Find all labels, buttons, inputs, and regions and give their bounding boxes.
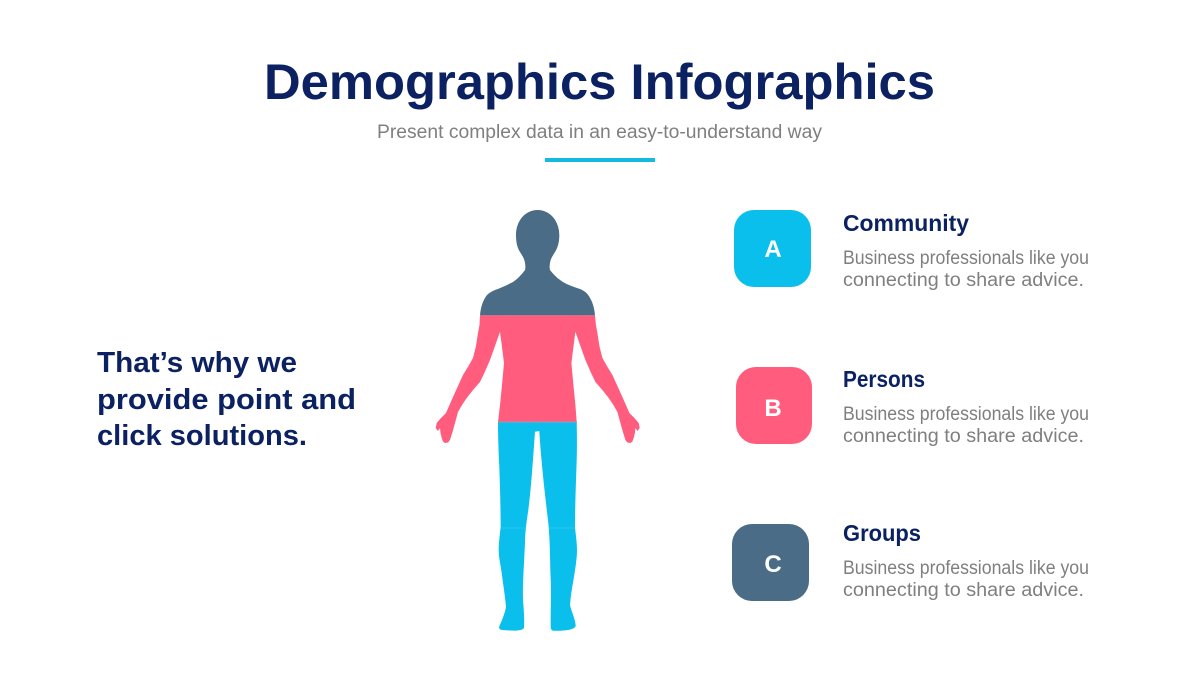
badge A xyxy=(734,210,811,287)
description A xyxy=(843,248,1089,291)
heading: Groups: Groups xyxy=(843,520,921,546)
statement text: That’s why we xyxy=(97,347,297,379)
statement text xyxy=(97,347,356,452)
statement text: click solutions. xyxy=(97,420,307,452)
description B xyxy=(843,404,1089,447)
description C: connecting to share advice. xyxy=(843,580,1084,601)
body section: torso and arms xyxy=(436,316,640,443)
item B xyxy=(736,366,1089,447)
human body figure xyxy=(436,210,640,631)
description C xyxy=(843,558,1089,601)
badge C: C xyxy=(764,551,782,578)
description A: Business professionals like you xyxy=(843,248,1089,269)
heading: Persons: Persons xyxy=(843,366,925,392)
body section: head and shoulders xyxy=(480,210,595,316)
badge B xyxy=(736,367,812,444)
item A xyxy=(734,210,1089,291)
statement text: provide point and xyxy=(97,384,356,416)
badge B: B xyxy=(764,395,782,422)
description B: Business professionals like you xyxy=(843,404,1089,425)
body section: legs xyxy=(498,422,577,631)
description A: connecting to share advice. xyxy=(843,270,1084,291)
description B: connecting to share advice. xyxy=(843,426,1084,447)
title underline xyxy=(545,158,655,162)
subtitle: Present complex data in an easy-to-understand way xyxy=(377,122,822,143)
heading: Community: Community xyxy=(843,210,969,236)
item C xyxy=(732,520,1089,601)
badge A: A xyxy=(764,236,782,263)
title: Demographics Infographics xyxy=(264,54,935,110)
badge C xyxy=(732,524,809,601)
description C: Business professionals like you xyxy=(843,558,1089,579)
